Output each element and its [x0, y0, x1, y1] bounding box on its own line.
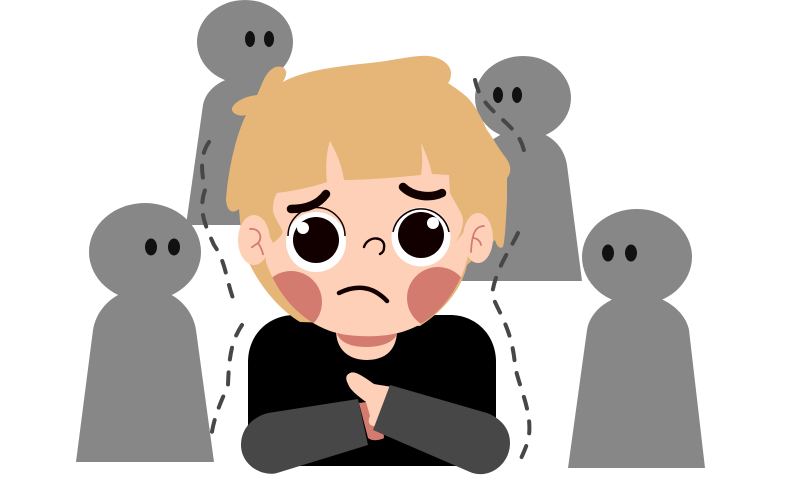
hair: [226, 56, 510, 326]
illustration: anxious child surrounded by gray figures: [76, 0, 705, 474]
face: [262, 141, 473, 336]
dashed trembling lines: [202, 80, 529, 461]
cheeks: [272, 267, 461, 324]
ear: right: [463, 213, 493, 263]
neck shadow: [336, 331, 397, 347]
figure: front left gray person: [76, 203, 214, 462]
mouth: [339, 288, 387, 301]
eye: right: [392, 208, 450, 266]
body: black shirt: [248, 315, 496, 466]
nose: [364, 238, 384, 254]
icon: back right eyes: [493, 87, 522, 103]
icon: front right eyes: [602, 244, 637, 262]
icon: back left eyes: [245, 31, 274, 47]
eyebrow: right: [403, 187, 442, 196]
figure: back left gray person: [186, 0, 305, 225]
ear: left: [238, 215, 270, 265]
figure: back right gray person: [455, 56, 582, 281]
left sleeve: [241, 399, 368, 474]
eyebrow: left: [291, 194, 326, 209]
right sleeve: [373, 385, 510, 474]
icon: front left eyes: [145, 238, 180, 256]
neck: [336, 330, 397, 360]
hand: fingers: [346, 372, 392, 440]
figure: front right gray person: [568, 209, 705, 468]
eye: left: [286, 208, 346, 272]
